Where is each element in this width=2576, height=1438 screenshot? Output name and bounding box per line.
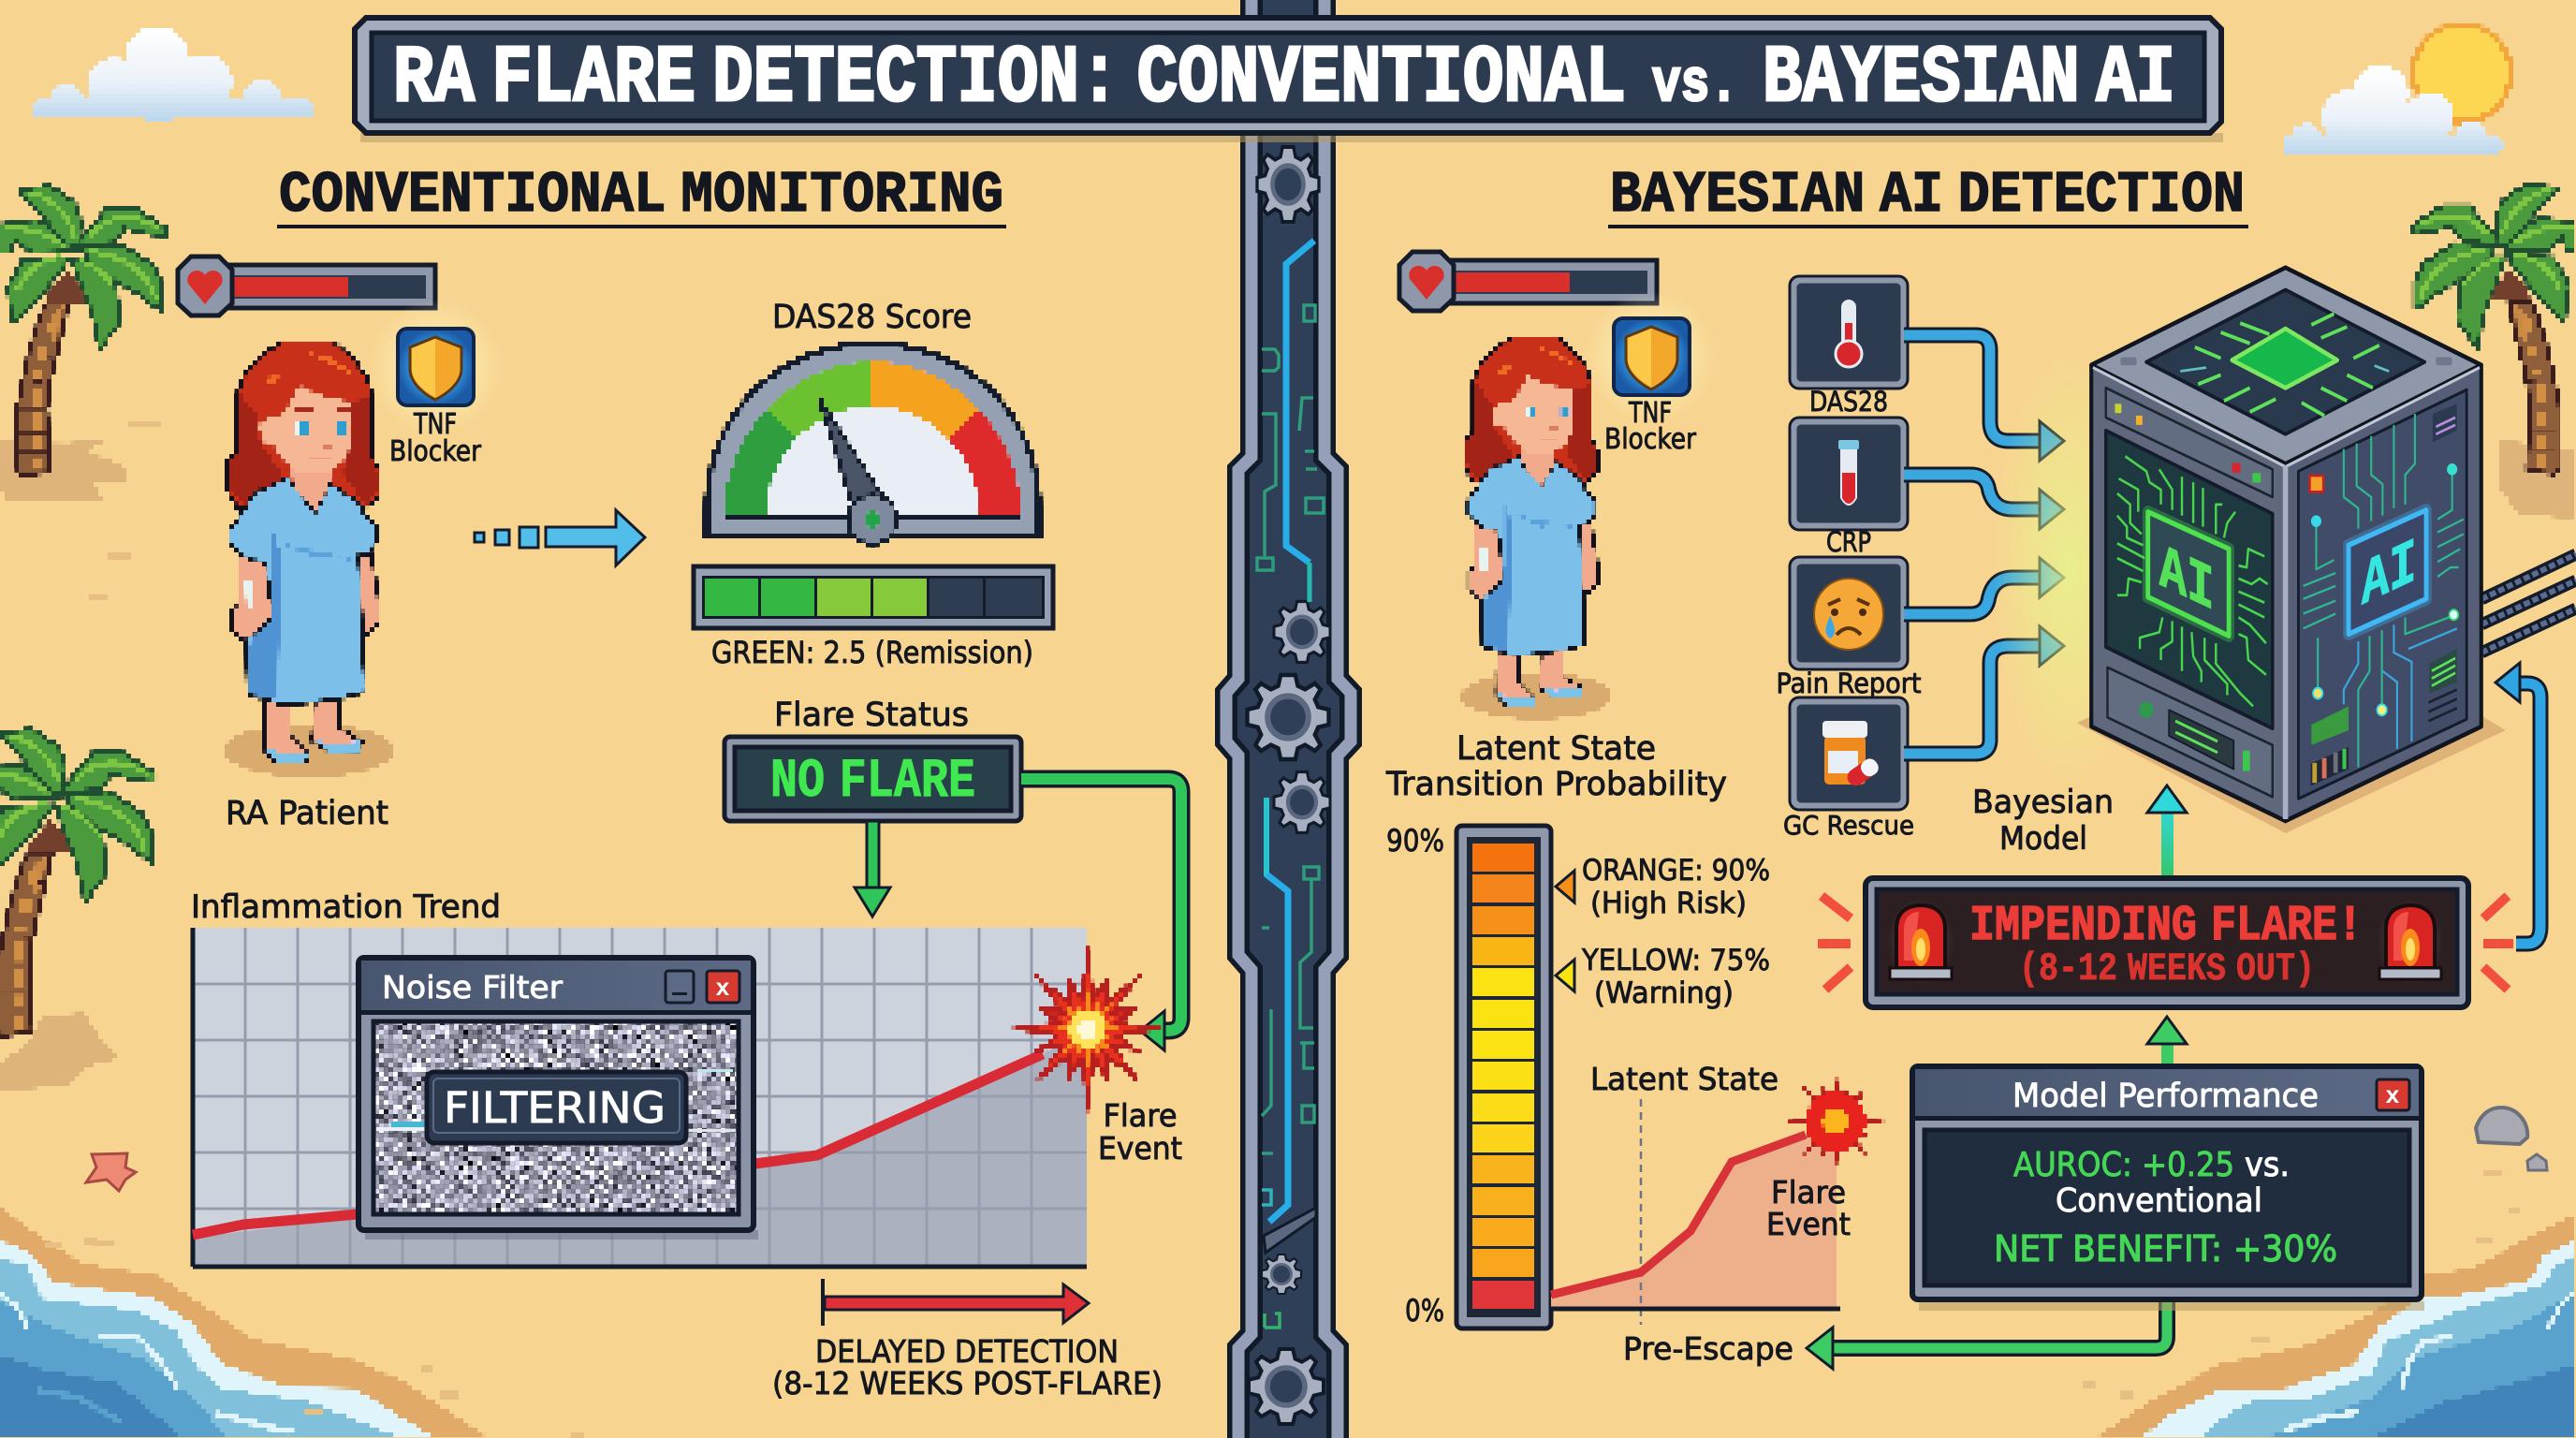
circuit traces on spine bbox=[1257, 241, 1324, 1328]
label: tnf blocker: TNF bbox=[1628, 397, 1672, 430]
arrow: performance to pre-escape bbox=[1807, 1299, 2167, 1369]
noise panel bbox=[373, 1021, 739, 1214]
input: crp: CRP bbox=[1826, 526, 1871, 558]
alert rays bbox=[1818, 896, 2513, 990]
label: delayed detection: (8-12 WEEKS POST-FLARE) bbox=[772, 1365, 1163, 1401]
input: crp bbox=[1790, 418, 1908, 558]
icon: test tube bbox=[1838, 440, 1859, 506]
panel: bayesian ai detection bbox=[1385, 252, 2576, 1369]
das28 segmented bar bbox=[694, 566, 1053, 628]
alert text bbox=[1969, 898, 2363, 991]
label: flare status: Flare Status bbox=[774, 697, 969, 734]
arrow: pain report to model bbox=[1904, 558, 2064, 614]
patient bbox=[223, 342, 395, 777]
label: inflammation trend: Inflammation Trend bbox=[191, 888, 501, 926]
rocks bbox=[2476, 1108, 2547, 1170]
window: model performance bbox=[1912, 1066, 2424, 1311]
panel: conventional monitoring bbox=[178, 257, 1182, 1401]
button: filtering bbox=[427, 1072, 686, 1143]
label: tnf blocker: Blocker bbox=[389, 435, 482, 468]
arrow: patient to gauge bbox=[475, 510, 645, 565]
icon: siren right bbox=[2377, 899, 2444, 985]
arrow: alert feedback to model bbox=[2496, 663, 2540, 944]
title text: RA FLARE DETECTION: CONVENTIONAL bbox=[393, 33, 1626, 125]
window: model performance: x bbox=[2386, 1080, 2400, 1108]
label: bayesian model bbox=[1972, 784, 2114, 858]
sun and cloud: top right bbox=[2284, 24, 2510, 155]
arrow: performance to alert bbox=[2147, 1017, 2187, 1067]
alert text: IMPENDING FLARE! bbox=[1969, 898, 2363, 954]
performance text: AUROC: +0.25 bbox=[2013, 1146, 2234, 1184]
health bar bbox=[1399, 252, 1657, 311]
label: delayed detection: DELAYED DETECTION bbox=[815, 1333, 1119, 1370]
cloud: top left bbox=[33, 26, 314, 124]
icon: pill bottle bbox=[1822, 721, 1881, 789]
arrow: gc rescue to model bbox=[1904, 626, 2064, 754]
side panel bbox=[2298, 389, 2466, 799]
palm tree: middle left bbox=[0, 728, 154, 1036]
arrow: alert to model bbox=[2147, 785, 2187, 878]
label: orange high risk bbox=[1582, 854, 1770, 920]
label: tnf blocker bbox=[389, 408, 482, 468]
alert text: (8-12 WEEKS OUT) bbox=[2019, 946, 2315, 991]
arrow: no flare to flare event bbox=[1021, 779, 1181, 1050]
gauge bbox=[707, 344, 1039, 544]
starfish bbox=[86, 1153, 136, 1191]
window: noise filter bbox=[359, 958, 754, 1230]
input: pain report bbox=[1777, 557, 1921, 699]
marker: orange bbox=[1556, 871, 1574, 902]
ai chip: green bbox=[2148, 512, 2229, 636]
input: das28: DAS28 bbox=[1809, 386, 1888, 418]
label: orange high risk: (High Risk) bbox=[1590, 887, 1747, 920]
label: yellow warning bbox=[1581, 944, 1770, 1010]
window: noise filter: Noise Filter bbox=[382, 969, 563, 1005]
input: gc rescue bbox=[1783, 697, 1914, 841]
chart: latent state curve bbox=[1551, 1099, 1840, 1325]
status box: no flare: NO FLARE bbox=[770, 752, 975, 813]
ai chip: green: AI bbox=[2159, 532, 2215, 629]
server glow bbox=[1994, 356, 2144, 786]
status box: no flare bbox=[724, 737, 1021, 821]
label: latent state: Latent State bbox=[1590, 1061, 1778, 1097]
input: pain report: Pain Report bbox=[1777, 668, 1921, 699]
arrow: das28 to model bbox=[1904, 335, 2064, 461]
label: latent state transition probability: Transition Probability bbox=[1385, 766, 1727, 803]
ai chip: blue: AI bbox=[2362, 526, 2417, 624]
title text: vs. bbox=[1652, 51, 1738, 119]
label: flare event: Event bbox=[1766, 1206, 1851, 1242]
palm tree: top left bbox=[0, 185, 166, 476]
heading: conventional monitoring: CONVENTIONAL MONITORING bbox=[279, 162, 1003, 228]
front status strip bbox=[2106, 388, 2273, 497]
icon: thermometer bbox=[1836, 300, 1862, 367]
window: noise filter: x bbox=[716, 973, 730, 1001]
icon: tnf blocker shield bbox=[1585, 291, 1716, 422]
label: pre-escape: Pre-Escape bbox=[1623, 1330, 1793, 1367]
label: tnf blocker bbox=[1604, 397, 1697, 456]
gears on spine bbox=[1247, 147, 1330, 1424]
palm tree: top right bbox=[2411, 183, 2576, 474]
probability bar bbox=[1456, 826, 1551, 1328]
label: delayed detection bbox=[772, 1333, 1163, 1401]
input: das28 bbox=[1790, 276, 1908, 418]
label: ra patient: RA Patient bbox=[226, 795, 388, 832]
title banner bbox=[355, 18, 2223, 142]
arrow: no flare to trend chart bbox=[855, 821, 890, 917]
label: latent state transition probability bbox=[1385, 730, 1727, 803]
label: tnf blocker: Blocker bbox=[1604, 423, 1697, 456]
label: flare event: Flare bbox=[1103, 1097, 1178, 1134]
label: bayesian model: Bayesian bbox=[1972, 784, 2114, 821]
label: flare event bbox=[1098, 1097, 1182, 1167]
front lower strip bbox=[2107, 668, 2273, 797]
icon: flare burst bbox=[1005, 945, 1170, 1113]
alert panel: impending flare bbox=[1866, 878, 2468, 1007]
label: tnf blocker: TNF bbox=[413, 408, 457, 441]
icon: tnf blocker shield bbox=[368, 300, 503, 434]
ai chip: blue bbox=[2349, 510, 2426, 634]
sand specks bbox=[45, 421, 2520, 1438]
title text: BAYESIAN AI bbox=[1763, 33, 2175, 125]
server: bayesian model bbox=[2077, 268, 2506, 833]
top circuit board bbox=[2146, 290, 2424, 434]
heading: bayesian ai detection: BAYESIAN AI DETECTION bbox=[1610, 162, 2245, 228]
icon: sad face bbox=[1814, 579, 1883, 650]
front screen bbox=[2106, 431, 2273, 728]
icon: siren left bbox=[1887, 899, 1954, 985]
icon: flare burst bbox=[1787, 1070, 1884, 1173]
label: flare event bbox=[1766, 1174, 1851, 1242]
label: bayesian model: Model bbox=[1999, 820, 2087, 858]
axis label: 0 percent: 0% bbox=[1405, 1293, 1444, 1328]
label: yellow warning: YELLOW: 75% bbox=[1581, 944, 1770, 977]
input: gc rescue: GC Rescue bbox=[1783, 810, 1914, 841]
axis label: 90 percent: 90% bbox=[1386, 823, 1444, 858]
arrow: crp to model bbox=[1904, 475, 2064, 529]
window: model performance: Model Performance bbox=[2012, 1078, 2319, 1115]
performance text: Conventional bbox=[2056, 1182, 2262, 1220]
label: latent state transition probability: Latent State bbox=[1456, 730, 1656, 768]
arrow: delayed detection bbox=[821, 1279, 1089, 1326]
label: green remission: GREEN: 2.5 (Remission) bbox=[711, 635, 1033, 670]
cables bbox=[2481, 554, 2576, 653]
chart: inflammation trend bbox=[193, 928, 1087, 1267]
performance text bbox=[1994, 1146, 2337, 1269]
label: flare event: Event bbox=[1098, 1130, 1182, 1167]
central spine bbox=[1226, 0, 1351, 1438]
marker: yellow bbox=[1556, 960, 1574, 991]
label: orange high risk: ORANGE: 90% bbox=[1582, 854, 1770, 888]
performance text: vs. bbox=[2245, 1146, 2290, 1184]
performance text: NET BENEFIT: +30% bbox=[1994, 1228, 2337, 1269]
label: das28 score: DAS28 Score bbox=[772, 299, 972, 336]
button: filtering: FILTERING bbox=[444, 1083, 666, 1133]
patient bbox=[1461, 337, 1611, 719]
label: yellow warning: (Warning) bbox=[1594, 976, 1734, 1010]
health bar bbox=[178, 257, 435, 315]
label: flare event: Flare bbox=[1771, 1174, 1846, 1211]
